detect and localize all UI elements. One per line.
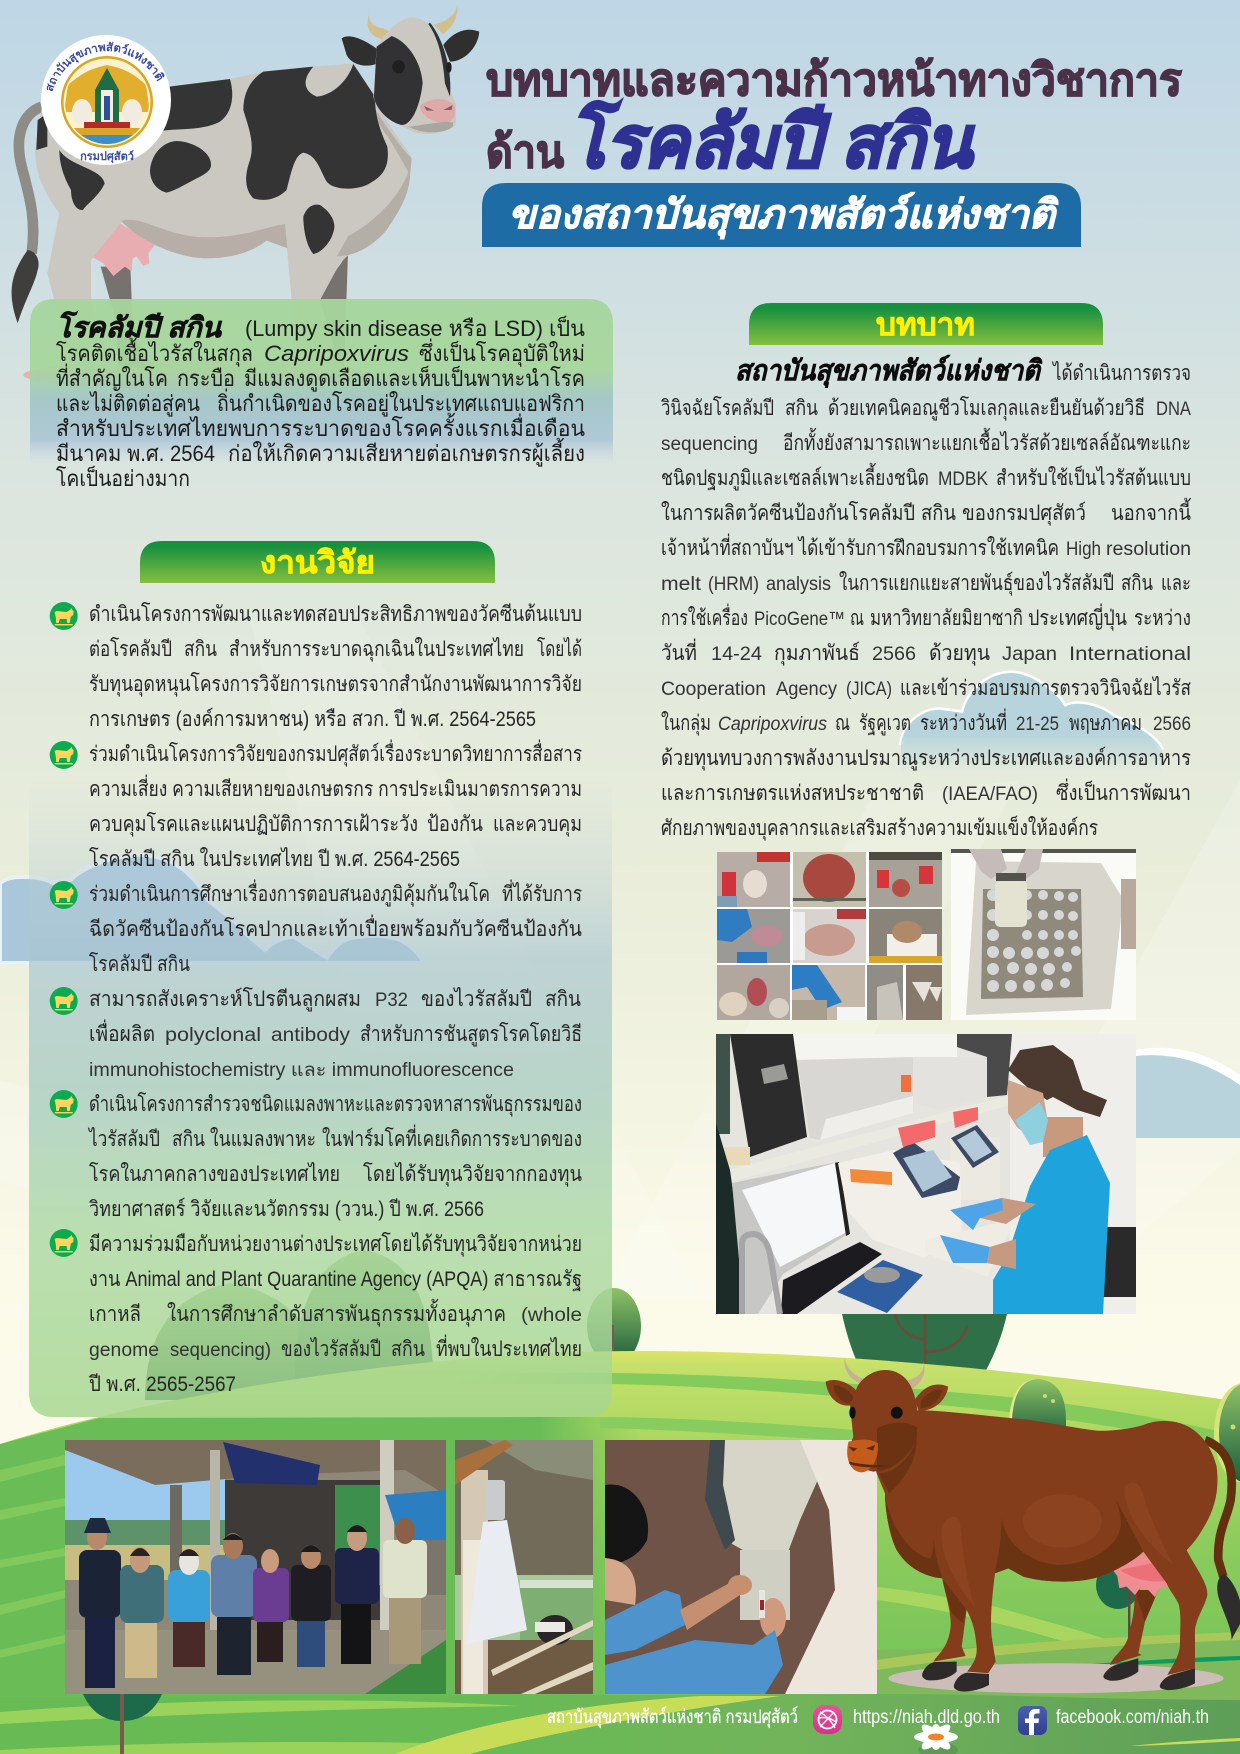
cow spots <box>36 64 388 254</box>
gloves <box>980 1198 1036 1224</box>
tree: behind panel <box>145 1250 433 1400</box>
research item 4: antibody <box>271 1025 351 1046</box>
photo: insect trap in cattle shed <box>455 1440 593 1694</box>
research item 2: ความเสี่ยง ความเสียหายของเกษตรกร การประเมินมาตรการความ <box>89 774 582 801</box>
green hills <box>0 1351 1240 1754</box>
intro text: ถิ่นกำเนิดของโรคอยู่ในประเทศแถบแอฟริกา <box>217 388 585 417</box>
belly shading <box>995 1500 1143 1582</box>
research item 1: ดำเนินโครงการพัฒนาและทดสอบประสิทธิภาพของวัคซีนต้นแบบ <box>89 602 582 626</box>
research item 6: ในการศึกษาลำดับสารพันธุกรรมทั้งอนุภาค <box>167 1299 506 1327</box>
text block: role description: กุมภาพันธ์ <box>774 641 860 666</box>
intro text: ก่อให้เกิดความเสียหายต่อเกษตรกรผู้เลี้ยง <box>228 438 585 467</box>
text block: role description: Japan <box>1002 644 1057 665</box>
shadow ellipse <box>888 1663 1224 1693</box>
research item 3: ที่ได้รับการ <box>502 879 582 906</box>
title banner <box>482 183 1081 247</box>
text block: role description: PicoGene™ <box>754 609 845 630</box>
icon: facebook <box>1018 1706 1047 1735</box>
intro text: โคเป็นอย่างมาก <box>56 464 190 491</box>
research item 5: ดำเนินโครงการสำรวจชนิดแมลงพาหะและตรวจหาสารพันธุกรรมของ <box>89 1092 582 1117</box>
research item 5: โดยได้รับทุนวิจัยจากกองทุน <box>363 1162 582 1187</box>
title: โรคลัมปี สกิน <box>568 100 975 183</box>
research item 1: สำหรับการระบาดฉุกเฉินในประเทศไทย <box>229 637 524 662</box>
research item 2: ร่วมดำเนินโครงการวิจัยของกรมปศุสัตว์เรื่องระบาดวิทยาการสื่อสาร <box>89 739 582 767</box>
research item 6: genome <box>89 1340 159 1361</box>
logo: National Institute of Animal Health seal <box>41 35 171 165</box>
text block: role description: ในกลุ่ม <box>661 711 711 736</box>
intro text: และไม่ติดต่อสู่คน <box>56 391 200 417</box>
text block: role description: 2566 <box>872 644 916 665</box>
icon: bullet cow 3 <box>50 881 78 909</box>
text block: role description: 14-24 <box>711 644 762 665</box>
text block: role description: วินิจฉัยโรคลัมปี <box>661 396 774 420</box>
icon: bullet cow 1 <box>50 602 78 630</box>
research item 6: ที่พบในประเทศไทย <box>436 1334 582 1361</box>
brown cow tail <box>1205 1440 1232 1577</box>
research item 4: สามารถสังเคราะห์โปรตีนลูกผสม <box>89 987 361 1012</box>
text block: role description: Capripoxvirus <box>718 714 827 735</box>
intro text: โรคติดเชื้อไวรัสในสกุล <box>56 338 253 367</box>
research item 1: รับทุนอุดหนุนโครงการวิจัยการเกษตรจากสำนักงานพัฒนาการวิจัย <box>89 672 582 697</box>
research item 4 <box>89 987 582 1081</box>
research item 1: ต่อโรคลัมปี <box>89 637 172 661</box>
text block: role description: มหาวิทยาลัยมิยาซากิ <box>870 607 1023 630</box>
brown cow head <box>826 1358 948 1493</box>
research item 4: ของไวรัสลัมปี <box>421 987 532 1011</box>
text block: role description: และ <box>1161 572 1191 595</box>
printers <box>903 1057 987 1110</box>
intro text: โรคลัมปี สกิน <box>56 310 223 343</box>
icon: bullet cow 2 <box>50 741 78 769</box>
text block: role description: 21-25 <box>1016 714 1059 735</box>
tree: bottom left <box>83 1694 162 1754</box>
text block: role description: ชนิดปฐมภูมิและเซลล์เพาะเลี้ยงชนิด <box>661 463 929 491</box>
belly shade <box>122 220 287 258</box>
text block: role description: สกิน <box>921 502 956 525</box>
icon: website <box>813 1705 842 1734</box>
intro text: กระบือ <box>177 366 235 391</box>
text block: role description: เจ้าหน้าที่สถาบันฯ ได้เข้ารับการฝึกอบรมการใช้เทคนิค <box>661 533 1059 560</box>
technician <box>1043 1117 1083 1157</box>
cow horns <box>368 5 457 40</box>
research item 4: P32 <box>375 990 408 1011</box>
research item 6: มีความร่วมมือกับหน่วยงานต่างประเทศโดยได้รับทุนวิจัยจากหน่วย <box>89 1232 582 1257</box>
cloud: right edge <box>1136 1048 1240 1138</box>
hooves <box>922 1658 1195 1691</box>
text block: role description: สกิน <box>785 397 818 420</box>
text block: role description: ประเทศญี่ปุ่น <box>1028 603 1127 631</box>
research item 1: โดยได้ <box>537 637 582 661</box>
cow tail <box>19 107 42 253</box>
heading: research: งานวิจัย <box>260 545 375 580</box>
research item 6 <box>88 1232 582 1396</box>
research item 5: โรคในภาคกลางของประเทศไทย <box>89 1162 340 1186</box>
neck shade <box>879 1433 917 1493</box>
text block: role description: สกิน <box>1121 572 1153 595</box>
text block: role description: ด้วยเทคนิคอณูชีวโมเลกุลและยืนยันด้วยวิธี <box>828 396 1145 421</box>
text block: role description: 2566 <box>1153 714 1191 735</box>
research item 1: การเกษตร (องค์การมหาชน) หรือ สวก. ปี พ.ศ. 2564-2565 <box>89 707 536 731</box>
text block: role description: International <box>1069 644 1191 665</box>
text block: role description: รัฐคูเวต <box>859 712 911 736</box>
panel: intro <box>30 299 613 491</box>
PCR machines <box>950 1137 1000 1200</box>
cloud: left <box>0 855 424 963</box>
text block: role description: ของกรมปศุสัตว์ <box>962 501 1086 526</box>
research item 3: โรคลัมปี สกิน <box>89 952 190 976</box>
research item 5 <box>87 1092 582 1221</box>
photo collage: tissue preparation grid <box>717 852 942 1020</box>
intro text: สำหรับประเทศไทยพบการระบาดของโรคครั้งแรกเมื่อเดือน <box>56 413 585 441</box>
research item 6: เกาหลี <box>89 1303 141 1326</box>
logo: National Institute of Animal Health seal: สถาบันสุขภาพสัตว์แห่งชาติ <box>46 42 164 91</box>
intro text: มีแมลงดูดเลือดและเห็บเป็นพาหะนำโรค <box>244 364 585 392</box>
research item 1 <box>89 602 582 731</box>
icon: daisy flower <box>914 1721 958 1754</box>
tree: behind brown cow top <box>1009 1379 1066 1440</box>
heading: role <box>749 303 1103 345</box>
research item 5: ในฟาร์มโคที่เคยเกิดการระบาดของ <box>322 1124 582 1151</box>
research item 5: วิทยาศาสตร์ วิจัยและนวัตกรรม (ววน.) ปี พ.ศ. 2566 <box>89 1197 484 1221</box>
photo: lab technician with PCR machines <box>716 1034 1136 1314</box>
text block: role description: ศักยภาพของบุคลากรและเสริมสร้างความเข้มแข็งให้องค์กร <box>661 814 1098 841</box>
research item 4: immunohistochemistry และ immunofluorescence <box>89 1060 514 1081</box>
ears <box>826 1380 948 1411</box>
research item 6: ปี พ.ศ. 2565-2567 <box>88 1373 236 1396</box>
panel: research backdrop <box>29 780 612 1417</box>
research item 4: polyclonal <box>165 1025 261 1046</box>
horns <box>844 1358 925 1389</box>
cow far legs <box>101 253 348 368</box>
research item 5: ไวรัสลัมปี <box>87 1127 160 1151</box>
text block: role description: analysis <box>766 574 831 595</box>
text block: role description: สำหรับใช้เป็นไวรัสต้นแบบ <box>996 464 1191 490</box>
heading: role: บทบาท <box>876 307 975 342</box>
research item 2 <box>89 739 582 871</box>
tree: behind brown cow belly <box>1096 1561 1140 1638</box>
research item 6: sequencing) <box>170 1340 271 1361</box>
intro text: ซึ่งเป็นโรคอุบัติใหม่ <box>419 338 585 367</box>
research item 4: สำหรับการชันสูตรโรคโดยวิธี <box>360 1022 582 1047</box>
text block: role description: ระหว่างวันที่ <box>920 708 1007 735</box>
text block: role description: ระหว่าง <box>1134 607 1191 630</box>
text block: role description: (HRM) <box>708 574 759 595</box>
head <box>847 1370 917 1472</box>
text block: role description: (IAEA/FAO) <box>942 784 1038 805</box>
text block: role description: นอกจากนี้ <box>1111 498 1191 525</box>
cow head <box>373 17 456 134</box>
research item 3: ร่วมดำเนินการศึกษาเรื่องการตอบสนองภูมิคุ้มกันในโค <box>89 879 490 907</box>
intro text: มีนาคม พ.ศ. 2564 <box>56 441 215 466</box>
text block: role description: ได้ดำเนินการตรวจ <box>1051 361 1191 385</box>
research item 6: (whole <box>521 1305 582 1326</box>
title: บทบาทและความก้าวหน้าทางวิชาการ <box>486 56 1182 105</box>
illustration: brown cow <box>870 1410 1240 1693</box>
monitor <box>732 1162 848 1314</box>
research item 5: สกิน <box>172 1128 205 1151</box>
footer: institute name: สถาบันสุขภาพสัตว์แห่งชาติ กรมปศุสัตว์ <box>547 1706 798 1729</box>
text block: role description <box>661 354 1191 841</box>
icon: bullet cow 4 <box>50 987 78 1015</box>
footer: website url: https://niah.dld.go.th <box>853 1707 1000 1728</box>
intro text <box>56 310 585 491</box>
text block: role description: (JICA) <box>846 679 892 700</box>
research item 3 <box>89 879 582 976</box>
text block: role description: DNA <box>1156 399 1191 420</box>
people <box>79 1518 427 1688</box>
cow udder <box>92 223 155 276</box>
text block: role description: ในการแยกแยะสายพันธุ์ของไวรัสลัมปี <box>839 571 1114 596</box>
text block: role description: ซึ่งเป็นการพัฒนา <box>1056 778 1191 805</box>
research item 6: สกิน <box>391 1338 425 1361</box>
tree: right of panel <box>587 1288 641 1395</box>
research item 1: สกิน <box>184 638 217 661</box>
heading: research <box>140 541 495 583</box>
text block: role description: พฤษภาคม <box>1069 712 1142 735</box>
photo: field team group photo <box>65 1440 446 1694</box>
title banner: ของสถาบันสุขภาพสัตว์แห่งชาติ <box>508 192 1059 240</box>
icon: bullet cow 5 <box>50 1090 78 1118</box>
text block: role description: MDBK <box>938 469 988 490</box>
research item 2: และควบคุม <box>493 813 582 837</box>
text block: role description: Cooperation <box>661 679 766 700</box>
research item 2: โรคลัมปี สกิน ในประเทศไทย ปี พ.ศ. 2564-2565 <box>89 847 460 871</box>
cloud: centre right <box>901 673 1162 772</box>
tree: top centre behind photo <box>842 1314 1007 1372</box>
research item 4: สกิน <box>545 988 581 1011</box>
tree: right edge <box>1214 1383 1240 1483</box>
research item 6: งาน Animal and Plant Quarantine Agency (APQA) สาธารณรัฐ <box>89 1268 582 1291</box>
cow shadow <box>23 360 370 390</box>
udder <box>1113 1552 1169 1597</box>
research item 2: ป้องกัน <box>427 813 483 836</box>
shelf <box>728 1095 1010 1182</box>
text block: role description: สถาบันสุขภาพสัตว์แห่งชาติ <box>735 354 1043 388</box>
text block: role description: High <box>1066 539 1101 560</box>
text block: role description: การใช้เครื่อง <box>661 603 748 630</box>
far rear leg <box>1110 1590 1158 1665</box>
research item 6: ของไวรัสลัมปี <box>281 1337 381 1361</box>
text block: role description: ด้วยทุน <box>929 642 990 666</box>
intro text: (Lumpy skin disease หรือ LSD) เป็น <box>245 314 585 341</box>
photo: vaccine vials in tray <box>951 849 1136 1020</box>
research item 2: ควบคุมโรคและแผนปฏิบัติการการเฝ้าระวัง <box>89 812 418 837</box>
footer: facebook handle: facebook.com/niah.th <box>1056 1707 1209 1728</box>
research item 5: ในแมลงพาหะ <box>210 1127 316 1151</box>
text block: role description: และการเกษตรแห่งสหประชาชาติ <box>661 782 924 805</box>
keyboard <box>781 1242 882 1314</box>
title <box>486 56 1182 183</box>
title: ด้าน <box>486 128 564 177</box>
text block: role description: ณ <box>835 712 850 735</box>
far front leg <box>933 1578 967 1662</box>
desk <box>776 1220 1010 1314</box>
text block: role description: ในการผลิตวัคซีนป้องกันโรคลัมปี <box>661 501 915 525</box>
text block: role description: melt <box>661 574 702 595</box>
research item 3: ฉีดวัคซีนป้องกันโรคปากและเท้าเปื่อยพร้อมกับวัคซีนป้องกัน <box>89 914 582 941</box>
photo: blood sampling from cow <box>605 1440 877 1694</box>
illustration: black and white cow <box>12 5 479 390</box>
text block: role description: resolution <box>1106 539 1191 560</box>
cow body <box>35 63 412 370</box>
body <box>870 1410 1217 1675</box>
intro text: ที่สำคัญในโค <box>56 363 168 391</box>
text block: role description: sequencing <box>661 434 758 455</box>
logo: National Institute of Animal Health seal: กรมปศุสัตว์ <box>80 150 134 164</box>
icon: bullet cow 6 <box>50 1229 78 1257</box>
intro text: Capripoxvirus <box>264 341 409 366</box>
cow ears <box>342 30 479 66</box>
text block: role description: ณ <box>850 607 864 630</box>
text block: role description: Agency <box>776 679 837 700</box>
text block: role description: วันที่ <box>661 638 697 665</box>
research item 4: เพื่อผลิต <box>89 1019 155 1046</box>
